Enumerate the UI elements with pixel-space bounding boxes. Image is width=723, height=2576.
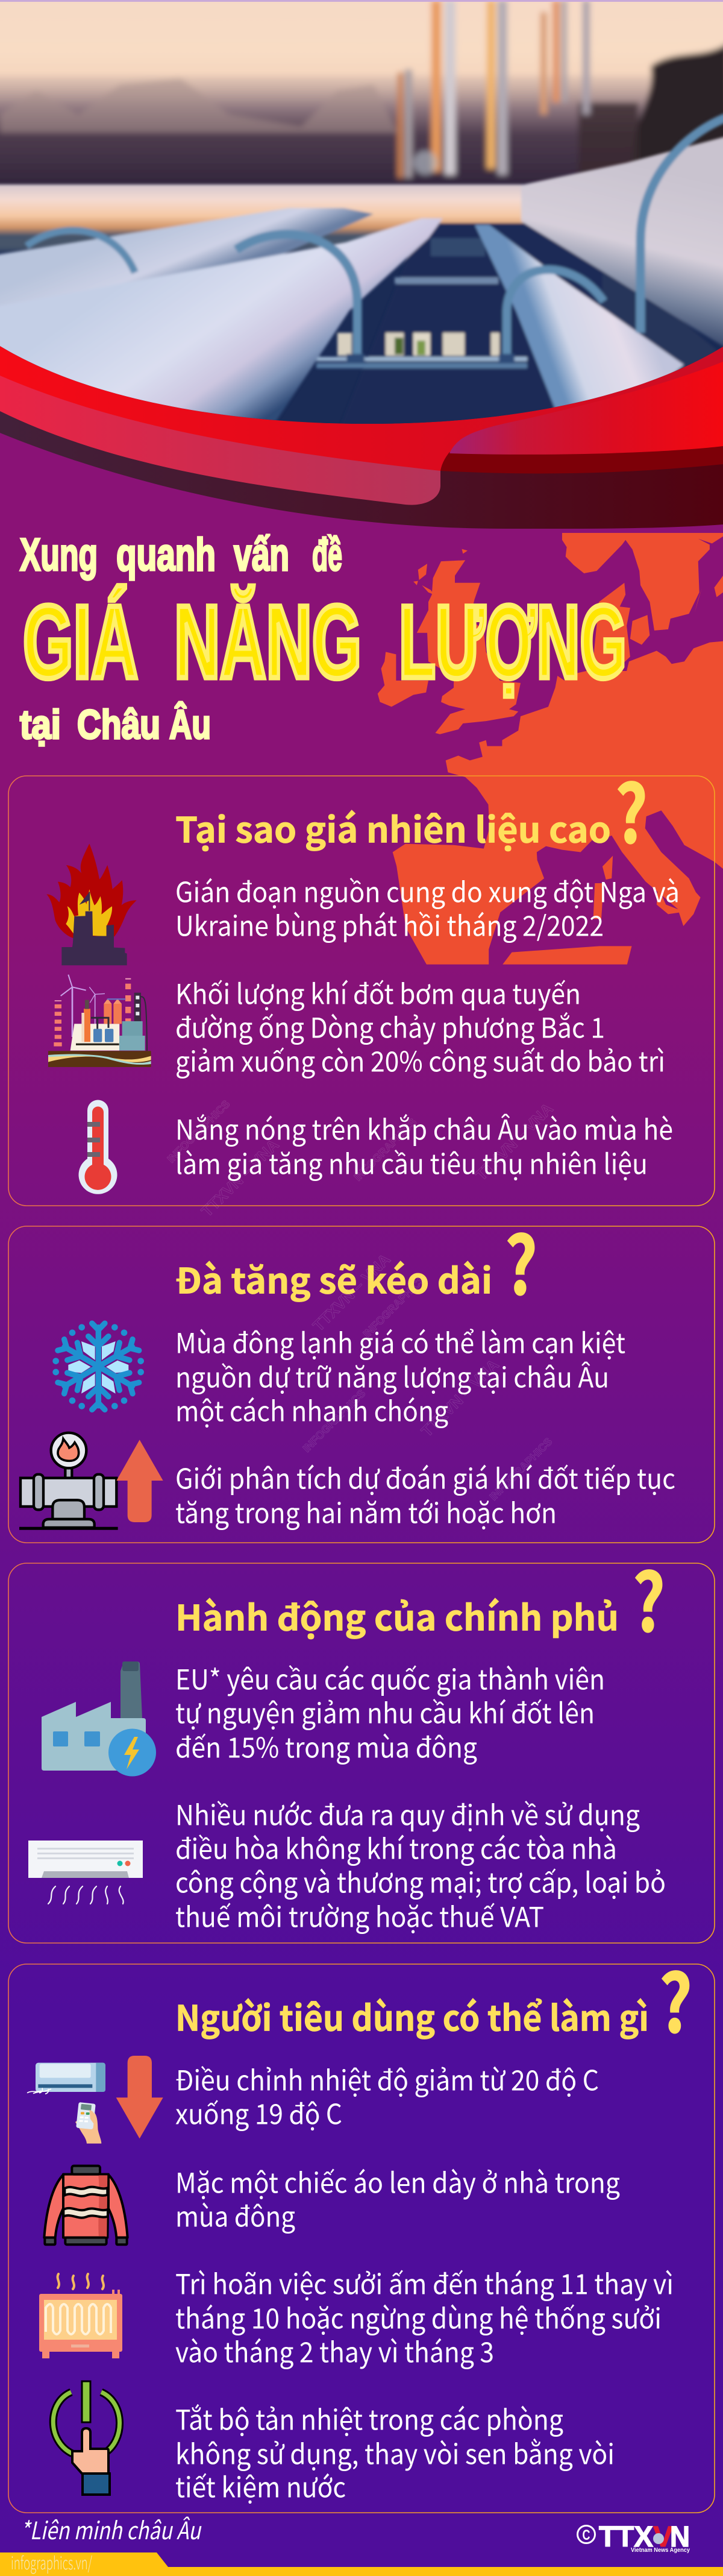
title line 2 (23, 584, 627, 700)
logo: TTXVN: TTX (599, 2521, 653, 2553)
text: temperature: xuống 19 độ C (175, 2093, 342, 2133)
text: cause 1: Gián đoạn nguồn cung do xung đột Nga và (175, 871, 680, 910)
title line 1: quanh (116, 529, 216, 581)
panel: why fuel prices are high (8, 751, 715, 1206)
icon: burning city (46, 843, 137, 965)
pipe: front left (0, 218, 443, 434)
watermarks: INFOGRAPHICS (487, 1435, 554, 1503)
title (20, 529, 627, 748)
text: forecast: tăng trong hai năm tới hoặc hơn (175, 1491, 557, 1531)
pipe: centre right (473, 223, 686, 408)
text: regulations (175, 1794, 666, 1935)
title line 2: NĂNG (174, 584, 362, 700)
text: regulations: điều hòa không khí trong các tòa nhà (175, 1828, 617, 1868)
text: heating: vào tháng 2 thay vì tháng 3 (175, 2331, 494, 2370)
watermarks: TTXVN – VNA (472, 1099, 557, 1184)
text: winter: Mùa đông lạnh giá có thể làm cạn kiệt (175, 1321, 625, 1361)
icon: heater (39, 2274, 122, 2358)
panel: what consumers can do (8, 1941, 715, 2513)
title line 3: tại (20, 702, 61, 748)
icon: gas pipe gauge (19, 1433, 118, 1528)
watermarks (165, 1098, 557, 1503)
icon: snowflake (52, 1323, 144, 1409)
icon: power button with hand (53, 2381, 120, 2495)
text: cause 2: Khối lượng khí đốt bơm qua tuyến (175, 973, 581, 1013)
title line 3: Châu (77, 702, 160, 748)
ribbon: dark red fold (440, 445, 723, 473)
logo: TTXVN: N (670, 2521, 690, 2553)
title line 1 (20, 529, 342, 581)
watermarks: INFOGRAPHICS (352, 1116, 419, 1183)
watermarks: TTXVN – VNA (309, 1250, 394, 1335)
text: cause 3: Nắng nóng trên khắp châu Âu vào mùa hè (175, 1108, 673, 1148)
u-bolt 3 (507, 269, 604, 357)
question mark: ? (633, 1540, 665, 1655)
icon: thermometer (78, 1100, 117, 1194)
logo: TTXVN: Vietnam News Agency (631, 2547, 690, 2554)
text: regulations: Nhiều nước đưa ra quy định về sử dụng (175, 1794, 640, 1834)
text: heating: tháng 10 hoặc ngừng dùng hệ thống sưởi (175, 2297, 662, 2337)
text: forecast: Giới phân tích dự đoán giá khí đốt tiếp tục (175, 1458, 675, 1497)
ribbon: red band (0, 301, 723, 471)
text: winter: nguồn dự trữ năng lượng tại châu Âu (175, 1356, 609, 1396)
icon: factory with energy (42, 1661, 156, 1776)
footnote: *Liên minh châu Âu (20, 2511, 202, 2546)
u-bolt 2 (236, 235, 357, 357)
map of Europe (378, 533, 723, 965)
pipe: back left (0, 208, 374, 307)
text: radiators: không sử dụng, thay vòi sen bằng vòi (175, 2433, 615, 2473)
ribbon: pink band (0, 301, 440, 505)
text: heating (175, 2263, 674, 2370)
photo: pipelines at sunset (0, 0, 723, 434)
text: radiators: tiết kiệm nước (175, 2466, 346, 2505)
text: radiators (175, 2398, 615, 2505)
ribbon: dark band (0, 301, 723, 529)
watermarks: INFOGRAPHICS (361, 1273, 428, 1340)
text: cause 1 (175, 871, 680, 944)
text: EU: tự nguyện giảm nhu cầu khí đốt lên (175, 1692, 595, 1731)
icon: up arrow (116, 1440, 163, 1522)
pipe: far right (521, 136, 723, 350)
text: winter (175, 1321, 625, 1430)
text: cause 3: làm gia tăng nhu cầu tiêu thụ nhiên liệu (175, 1143, 648, 1183)
icon: air conditioner (28, 1841, 143, 1904)
watermarks: INFOGRAPHICS (301, 1387, 368, 1455)
text: EU: đến 15% trong mùa đông (175, 1727, 477, 1766)
text: winter: một cách nhanh chóng (175, 1390, 448, 1430)
watermarks: INFOGRAPHICS (165, 1098, 232, 1165)
footer url: infographics.vn/ (11, 2549, 92, 2575)
text: EU (175, 1658, 605, 1766)
title line 1: vấn (234, 529, 289, 581)
title line 2: GIÁ (23, 584, 138, 700)
question mark: ? (615, 751, 648, 866)
logo: TTXVN: C (582, 2527, 590, 2543)
heading: Tại sao giá nhiên liệu cao (175, 802, 611, 852)
text: EU: EU* yêu cầu các quốc gia thành viên (175, 1658, 605, 1698)
u-bolt 1 (27, 230, 135, 272)
watermarks: TTXVN – VNA (418, 1355, 502, 1440)
text: cause 3 (175, 1108, 673, 1183)
text: heating: Trì hoãn việc sưởi ấm đến tháng 11 thay vì (175, 2263, 674, 2303)
icon: down arrow (116, 2056, 163, 2138)
title line 3 (20, 701, 211, 748)
text: cause 2: đường ống Dòng chảy phương Bắc 1 (175, 1007, 605, 1047)
text: sweater: Mặc một chiếc áo len dày ở nhà trong (175, 2162, 620, 2202)
text: regulations: thuế môi trường hoặc thuế VAT (175, 1895, 544, 1935)
text: regulations: công cộng và thương mại; trợ cấp, loại bỏ (175, 1862, 666, 1901)
text: temperature (175, 2059, 599, 2133)
question mark: ? (505, 1203, 537, 1318)
heading: Đà tăng sẽ kéo dài (175, 1253, 492, 1303)
u-bolt 4 (640, 118, 723, 333)
title line 1: Xung (20, 529, 98, 581)
panel: the rise will last (8, 1203, 715, 1543)
logo: TTXVN: V (653, 2521, 673, 2553)
text: cause 2: giảm xuống còn 20% công suất do bảo trì (175, 1041, 665, 1080)
text: cause 2 (175, 973, 665, 1080)
icon: gas plant (48, 975, 151, 1067)
text: sweater: mùa đông (175, 2196, 295, 2235)
title line 1: đề (312, 529, 342, 581)
top edge line (0, 0, 723, 2)
text: radiators: Tắt bộ tản nhiệt trong các phòng (175, 2398, 563, 2438)
text: sweater (175, 2162, 620, 2235)
title line 3: Âu (169, 701, 211, 748)
question mark: ? (659, 1941, 692, 2056)
panel: government action (8, 1540, 715, 1943)
icon: air conditioner with remote (27, 2063, 105, 2144)
logo: TTXVN (577, 2521, 690, 2554)
text: temperature: Điều chỉnh nhiệt độ giảm từ 20 độ C (175, 2059, 599, 2099)
heading: Hành động của chính phủ (175, 1590, 619, 1641)
heading: Người tiêu dùng có thể làm gì (175, 1991, 649, 2041)
footer bar (0, 2552, 723, 2576)
ribbon: gradient fold (449, 362, 723, 455)
text: cause 1: Ukraine bùng phát hồi tháng 2/2022 (175, 904, 604, 944)
icon: sweater (44, 2166, 128, 2244)
text: forecast (175, 1458, 675, 1531)
watermarks: TTXVN – VNA (198, 1135, 283, 1220)
